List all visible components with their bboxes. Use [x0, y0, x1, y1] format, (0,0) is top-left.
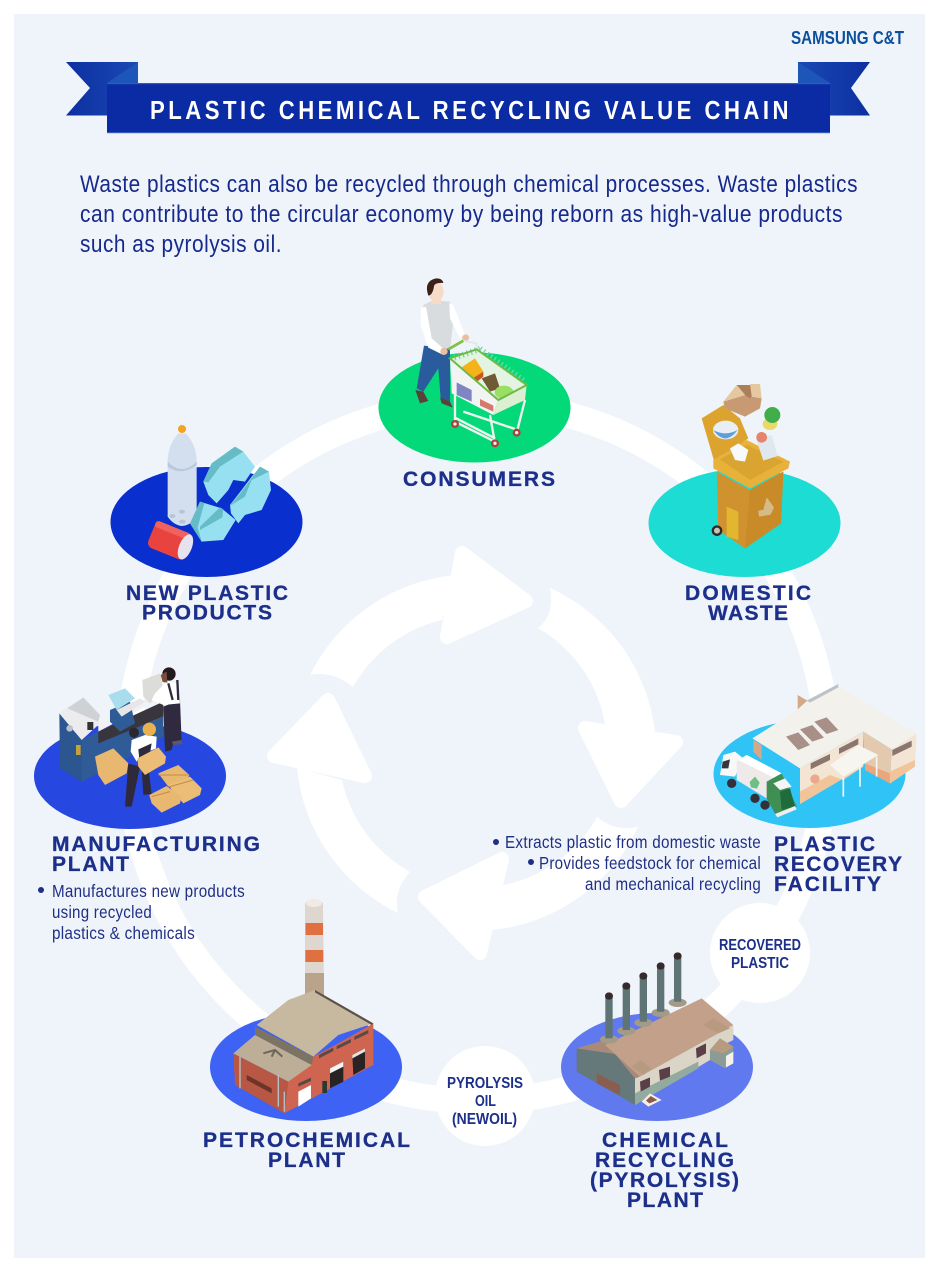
- label: manufacturing plant: [52, 833, 260, 876]
- label: domestic waste: [685, 582, 811, 625]
- label: petrochemical plant: PETROCHEMICAL: [203, 1129, 410, 1152]
- title banner: [66, 62, 870, 133]
- icon: machine and workers: [59, 667, 202, 813]
- bubble: recovered plastic: [710, 903, 810, 1003]
- label: new plastic products: [126, 582, 288, 624]
- label: plastic recovery facility: [774, 833, 902, 896]
- description: manufacturing plant: plastics & chemicals: [52, 923, 195, 943]
- bubble: pyrolysis oil: [435, 1046, 535, 1146]
- label: manufacturing plant: MANUFACTURING: [52, 833, 260, 856]
- label: chemical recycling plant: RECYCLING: [595, 1149, 734, 1172]
- label: plastic recovery facility: RECOVERY: [774, 853, 902, 876]
- platform: new plastic products: [110, 467, 302, 577]
- label: plastic recovery facility: PLASTIC: [774, 833, 875, 856]
- platform: manufacturing plant: [34, 723, 226, 829]
- label: petrochemical plant: [203, 1129, 410, 1172]
- node: petrochemical plant: [203, 899, 410, 1172]
- description: manufacturing plant: Manufactures new products: [52, 881, 245, 901]
- platform: domestic waste: [648, 469, 840, 577]
- label: new plastic products: PRODUCTS: [142, 602, 272, 624]
- description: plastic recovery facility: Extracts plastic from domestic waste: [505, 832, 761, 852]
- label: domestic waste: DOMESTIC: [685, 582, 811, 605]
- description: plastic recovery facility: and mechanical recycling: [585, 874, 761, 894]
- icon: bottle, can and recycling symbol: [146, 425, 271, 562]
- label: chemical recycling plant: [590, 1129, 739, 1212]
- node: plastic recovery facility: [493, 684, 917, 896]
- platform: petrochemical plant: [210, 1013, 402, 1121]
- icon: pyrolysis plant with stacks: [577, 952, 733, 1107]
- label: consumers: CONSUMERS: [403, 468, 555, 491]
- intro text: [80, 171, 858, 258]
- inner circular arrows: [274, 553, 676, 953]
- node: domestic waste: [648, 384, 840, 625]
- bubble: pyrolysis oil: OIL: [475, 1093, 496, 1110]
- icon: petrochemical factory: [233, 990, 373, 1113]
- label: petrochemical plant: PLANT: [268, 1149, 345, 1172]
- large value chain ring: [129, 403, 827, 1101]
- node: consumers: [378, 278, 570, 491]
- bubble: pyrolysis oil: PYROLYSIS: [447, 1075, 523, 1092]
- node: manufacturing plant: [34, 667, 260, 943]
- node: new plastic products: [110, 425, 302, 624]
- bubble: recovered plastic: PLASTIC: [731, 955, 789, 972]
- label: chemical recycling plant: CHEMICAL: [602, 1129, 728, 1152]
- icon: recovery building and truck: [720, 684, 917, 817]
- label: manufacturing plant: PLANT: [52, 853, 129, 876]
- intro text: such as pyrolysis oil.: [80, 231, 282, 258]
- description: manufacturing plant: [38, 881, 245, 943]
- description: plastic recovery facility: Provides feedstock for chemical: [539, 853, 761, 873]
- label: plastic recovery facility: FACILITY: [774, 873, 881, 896]
- icon: chimney: [305, 899, 324, 997]
- label: chemical recycling plant: (PYROLYSIS): [590, 1169, 739, 1192]
- icon: recycling bin with waste: [702, 384, 790, 548]
- title banner: PLASTIC CHEMICAL RECYCLING VALUE CHAIN: [150, 97, 792, 125]
- platform: chemical recycling plant: [561, 1013, 753, 1121]
- label: new plastic products: NEW PLASTIC: [126, 582, 288, 605]
- brand logo text: SAMSUNG C&T: [791, 28, 904, 48]
- description: plastic recovery facility: [493, 832, 761, 894]
- platform: plastic recovery facility: [714, 720, 906, 828]
- label: chemical recycling plant: PLANT: [627, 1189, 703, 1212]
- node: chemical recycling plant: [561, 952, 753, 1212]
- icon: shopper with cart: [415, 278, 527, 447]
- bubble: pyrolysis oil: (NEWOIL): [452, 1111, 517, 1128]
- label: domestic waste: WASTE: [708, 602, 788, 625]
- platform: consumers: [378, 352, 570, 462]
- bubble: recovered plastic: RECOVERED: [719, 937, 801, 954]
- description: manufacturing plant: using recycled: [52, 902, 152, 922]
